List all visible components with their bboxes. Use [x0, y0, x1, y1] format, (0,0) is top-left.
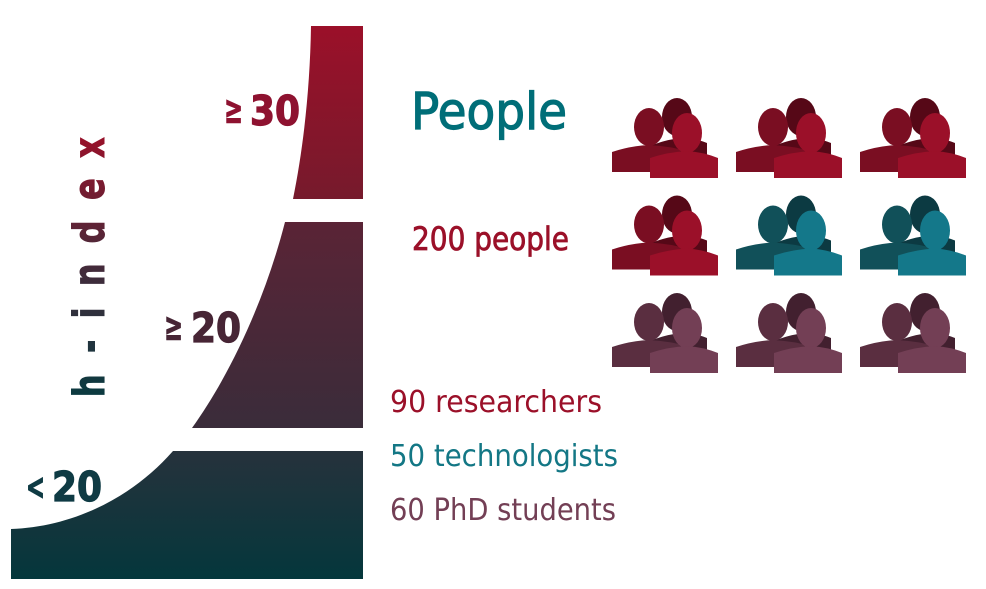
icon: red group 4 [612, 196, 718, 276]
label: under 20 [26, 463, 102, 511]
icon: plum group 1 [612, 293, 718, 373]
label: at least 30: ≥ [224, 87, 243, 133]
band: h-index at least 30 [224, 26, 363, 199]
total: 200 people: 200 people [412, 220, 569, 258]
label: under 20: < [26, 467, 45, 508]
label: at least 30 [224, 87, 300, 135]
axis label: h-index: h-index [64, 137, 114, 397]
label: under 20: 20 [52, 463, 102, 511]
icon: red group 2 [736, 98, 842, 178]
band: h-index at least 20 [164, 222, 363, 428]
icon: teal group 1 [736, 196, 842, 276]
stat: 60 PhD students: 60 PhD students [390, 493, 616, 528]
icon grid: people [612, 98, 966, 373]
stat: 90 researchers: 90 researchers [390, 385, 602, 420]
band: h-index under 20 [11, 451, 363, 579]
label: at least 20: 20 [191, 304, 241, 352]
icon: red group 3 [860, 98, 966, 178]
icon: plum group 2 [736, 293, 842, 373]
label: at least 20: ≥ [164, 304, 183, 350]
icon: teal group 2 [860, 196, 966, 276]
stat: 50 technologists: 50 technologists [390, 439, 618, 474]
label: at least 30: 30 [250, 87, 300, 135]
heading: People: People [411, 83, 567, 142]
icon: red group 1 [612, 98, 718, 178]
icon: plum group 3 [860, 293, 966, 373]
label: at least 20 [164, 304, 241, 352]
